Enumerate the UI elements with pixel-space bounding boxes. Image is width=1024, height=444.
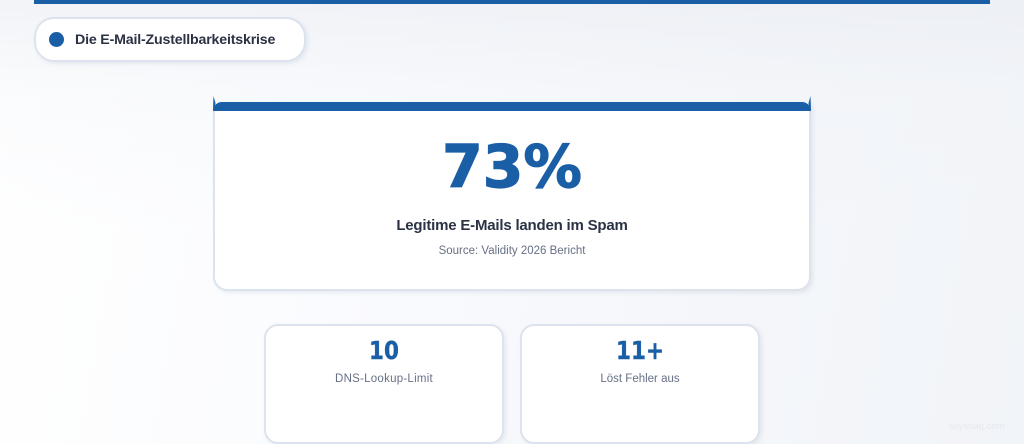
label: Löst Fehler aus: [600, 373, 680, 385]
top accent bar: [34, 0, 990, 4]
big number 73%: 73%: [442, 132, 582, 201]
title badge: [34, 17, 306, 62]
label: DNS-Lookup-Limit: [335, 373, 433, 385]
number 10: 10: [369, 336, 399, 365]
stat description: Legitime E-Mails landen im Spam: [396, 217, 628, 234]
panel: triggers errors: [520, 324, 760, 444]
left spike: [213, 96, 216, 111]
source note: Source: Validity 2026 Bericht: [439, 245, 585, 257]
icon: corner spikes on main panel: [213, 96, 811, 111]
panel: DNS lookup limit: [264, 324, 504, 444]
number 11+: 11+: [616, 336, 664, 365]
top bar of main panel: [213, 102, 811, 111]
right spike: [808, 96, 811, 111]
panel: main statistic: [213, 102, 811, 291]
title: Die E-Mail-Zustellbarkeitskrise: [75, 32, 275, 48]
icon: status dot: [49, 32, 64, 47]
watermark: skysnag.com: [949, 421, 1004, 432]
